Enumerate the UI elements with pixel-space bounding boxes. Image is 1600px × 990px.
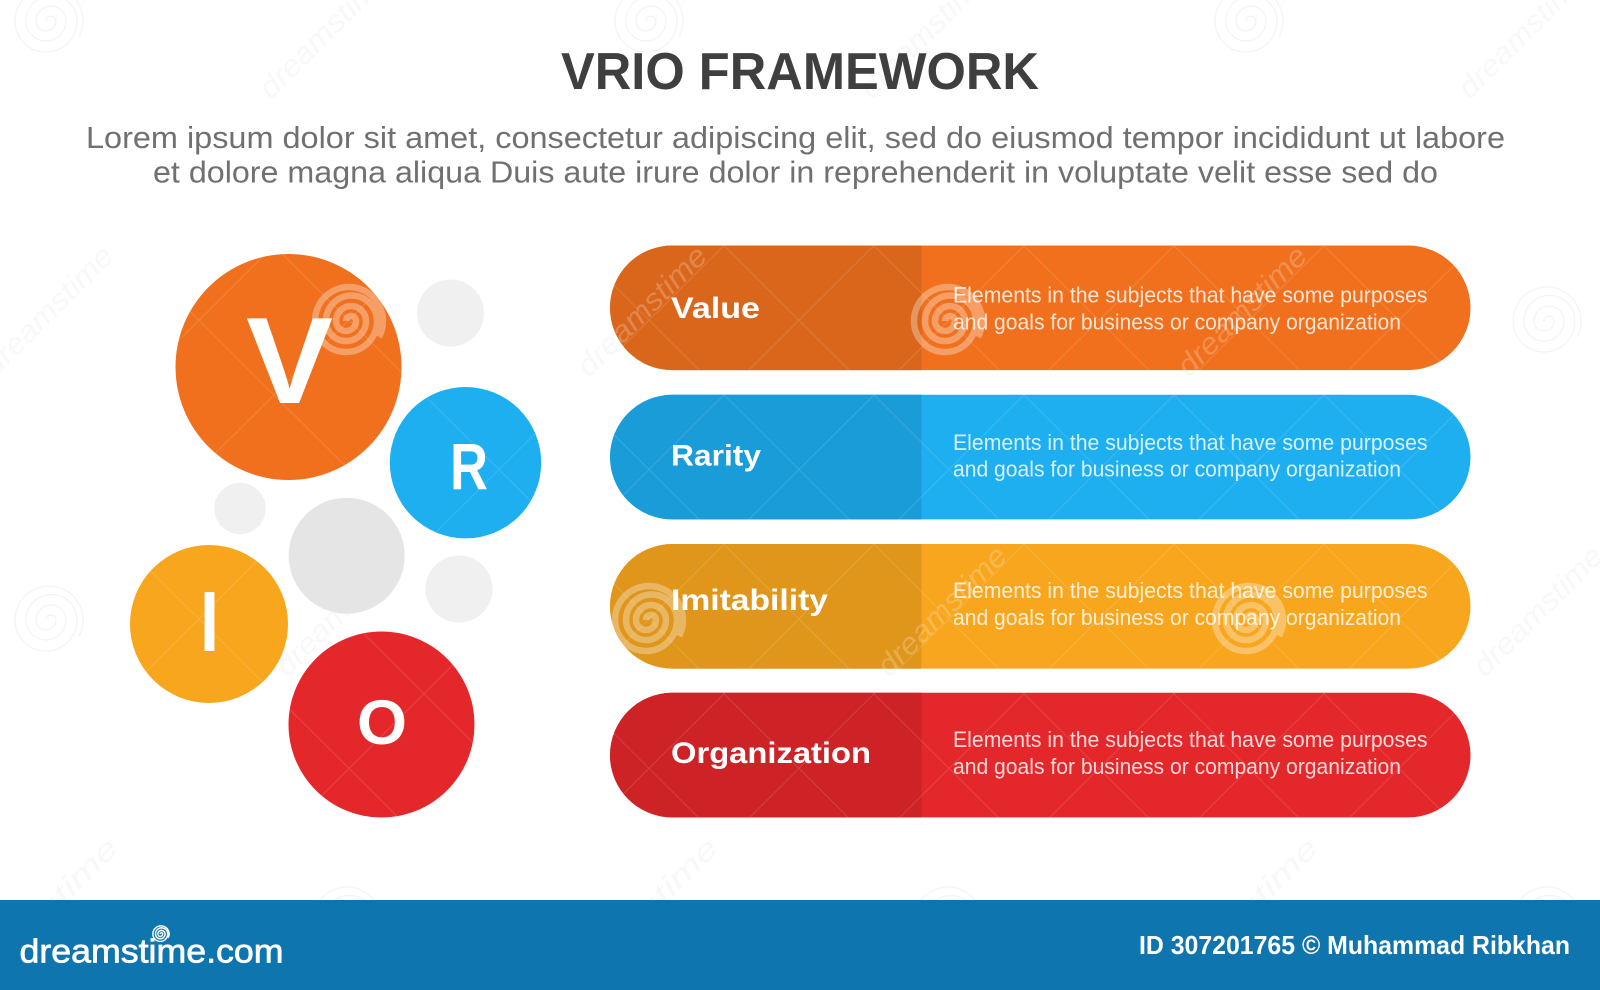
watermark: overlay on coloured shapes: dreamstime [871, 540, 1014, 683]
bar: Rarity: Elements in the subjects that have some purposes [953, 430, 1428, 455]
subtitle text block [86, 120, 1505, 190]
watermark: overlay on coloured shapes: dreamstime [269, 540, 412, 683]
circle V [176, 254, 402, 480]
watermark: light spirals and text on white: dreamstime [1467, 540, 1600, 683]
bar: Rarity [610, 395, 1470, 519]
circle R: R [450, 429, 488, 503]
bar: Organization: Organization [671, 737, 871, 770]
bar: Imitability: Imitability [671, 584, 828, 617]
footer bar [0, 900, 1600, 990]
watermark: overlay on coloured shapes: dreamstime [1171, 240, 1314, 383]
circle I [130, 545, 288, 703]
bar: Rarity: and goals for business or company organization [953, 456, 1401, 482]
circle O: O [357, 688, 407, 758]
watermark: light spirals and text on white: dreamstime [571, 240, 714, 383]
bar: Value: Elements in the subjects that have some purposes [953, 282, 1428, 308]
bar: Imitability [610, 544, 1470, 669]
decorative grey bubbles [214, 280, 493, 622]
circle I: I [200, 575, 219, 670]
watermark: light spirals and text on white: dreamstime [871, 540, 1014, 683]
watermark: overlay on coloured shapes [146, 246, 1454, 818]
bar: Value [610, 246, 1470, 370]
bar: Value: and goals for business or company organization [953, 310, 1401, 334]
bar: Imitability: Elements in the subjects that have some purposes [953, 578, 1428, 603]
bar: Imitability: and goals for business or company organization [953, 605, 1401, 630]
watermark: light spirals and text on white: stime [1231, 831, 1325, 925]
title: VRIO FRAMEWORK [561, 43, 1039, 101]
bar: Rarity: Rarity [671, 440, 761, 472]
subtitle text block: Lorem ipsum dolor sit amet, consectetur adipiscing elit, sed do eiusmod tempor incididunt ut labore [86, 120, 1505, 155]
subtitle text block: et dolore magna aliqua Duis aute irure dolor in reprehenderit in voluptate velit esse sed do [153, 154, 1438, 190]
footer credit: ID 307201765 © Muhammad Ribkhan [1139, 930, 1570, 960]
bar: Organization: Elements in the subjects that have some purposes [953, 727, 1428, 752]
panel: VRIO bars [610, 246, 1470, 817]
watermark: light spirals and text on white: dreamstime [1171, 240, 1314, 383]
watermark: light spirals and text on white: stime [31, 831, 125, 925]
watermark: light spirals and text on white: stime [631, 831, 725, 925]
panel: VRIO circle cluster [130, 254, 541, 818]
circle R [390, 387, 541, 538]
bar: Organization: and goals for business or company organization [953, 754, 1401, 779]
bar: Organization [610, 693, 1470, 817]
footer logo: dreamstime.com: dreamstime.com [20, 932, 284, 970]
watermark: light spirals and text on white: dreamstime [269, 540, 412, 683]
bar: Value: Value [671, 292, 760, 325]
circle O [288, 632, 474, 818]
circle V: V [246, 293, 333, 430]
watermark: overlay on coloured shapes: dreamstime [571, 240, 714, 383]
